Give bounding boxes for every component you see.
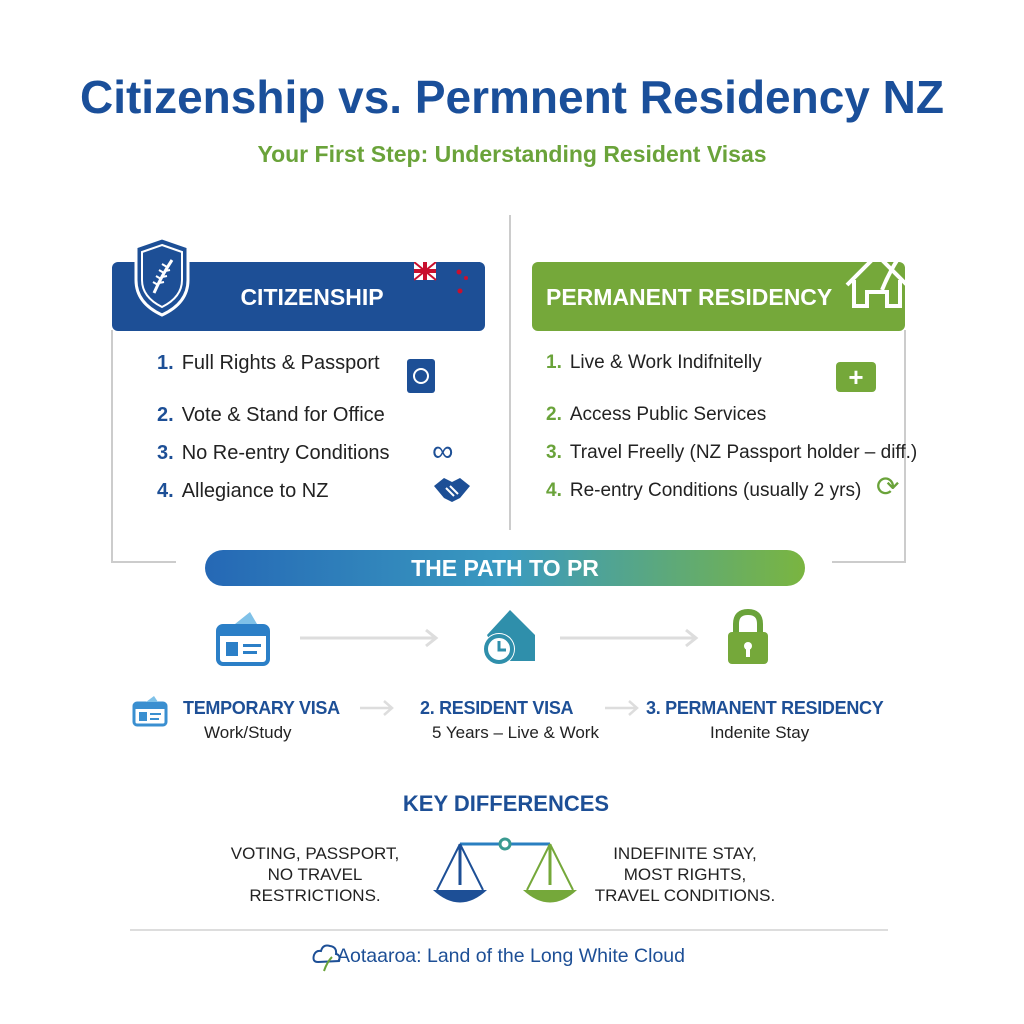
list: citizenship: ∞ — [432, 435, 453, 468]
list: pr: + — [848, 362, 864, 392]
title: Citizenship vs. Permnent Residency NZ — [80, 71, 944, 123]
header: pr: PERMANENT RESIDENCY — [546, 284, 832, 310]
step 3: 3. PERMANENT RESIDENCY — [646, 698, 883, 718]
icon: scales — [433, 838, 577, 902]
text: citizenship differences: VOTING, PASSPORT, — [231, 844, 399, 863]
arrow 1 — [300, 629, 438, 647]
panel: permanent residency — [532, 262, 917, 502]
list: citizenship: 4. Allegiance to NZ — [157, 480, 328, 502]
step 3: Indenite Stay — [710, 723, 809, 742]
text: citizenship differences: NO TRAVEL — [268, 865, 362, 884]
panel: citizenship — [112, 240, 485, 502]
list: citizenship: 2. Vote & Stand for Office — [157, 404, 385, 426]
step 1: Work/Study — [204, 723, 292, 742]
icon: lock — [728, 609, 768, 664]
list: pr: 1. Live & Work Indifnitelly — [546, 352, 762, 373]
banner: path to pr: THE PATH TO PR — [411, 555, 599, 581]
heading: key differences: KEY DIFFERENCES — [403, 791, 609, 816]
text: pr differences: INDEFINITE STAY, — [613, 844, 757, 863]
step 2: 2. RESIDENT VISA — [420, 698, 573, 718]
subtitle: Your First Step: Understanding Resident Visas — [257, 141, 767, 167]
list: pr — [546, 352, 917, 502]
header: citizenship — [112, 262, 485, 331]
icon: house fern — [846, 262, 905, 308]
step 1: TEMPORARY VISA — [183, 698, 340, 718]
text: pr differences: MOST RIGHTS, — [624, 865, 746, 884]
text: citizenship differences: RESTRICTIONS. — [249, 886, 381, 905]
list: pr: 4. Re-entry Conditions (usually 2 yrs) — [546, 480, 861, 501]
header: citizenship: CITIZENSHIP — [240, 284, 384, 310]
header: pr — [532, 262, 905, 331]
list: citizenship: 1. Full Rights & Passport — [157, 352, 380, 374]
list: citizenship: 3. No Re-entry Conditions — [157, 442, 390, 464]
icon: house clock — [484, 610, 535, 664]
step 1 — [132, 696, 340, 742]
arrow 2 — [560, 629, 698, 647]
arrow small 1 — [360, 700, 394, 716]
list: citizenship — [157, 352, 470, 502]
icon: nz flag — [414, 262, 480, 294]
step 2 — [420, 698, 599, 742]
footer: Aotaaroa: Land of the Long White Cloud — [337, 945, 685, 967]
list: pr: 2. Access Public Services — [546, 404, 766, 425]
banner: path to pr — [205, 550, 805, 586]
text: pr differences — [595, 844, 775, 905]
list: pr: ⟳ — [876, 471, 899, 502]
text: pr differences: TRAVEL CONDITIONS. — [595, 886, 775, 905]
icon: visa card — [216, 612, 270, 666]
step 2: 5 Years – Live & Work — [432, 723, 599, 742]
text: citizenship differences — [230, 844, 399, 905]
list: pr: 3. Travel Freelly (NZ Passport holder – diff.) — [546, 442, 917, 463]
arrow small 2 — [605, 700, 639, 716]
step 3 — [646, 698, 884, 742]
icon: shield fern — [134, 240, 190, 317]
